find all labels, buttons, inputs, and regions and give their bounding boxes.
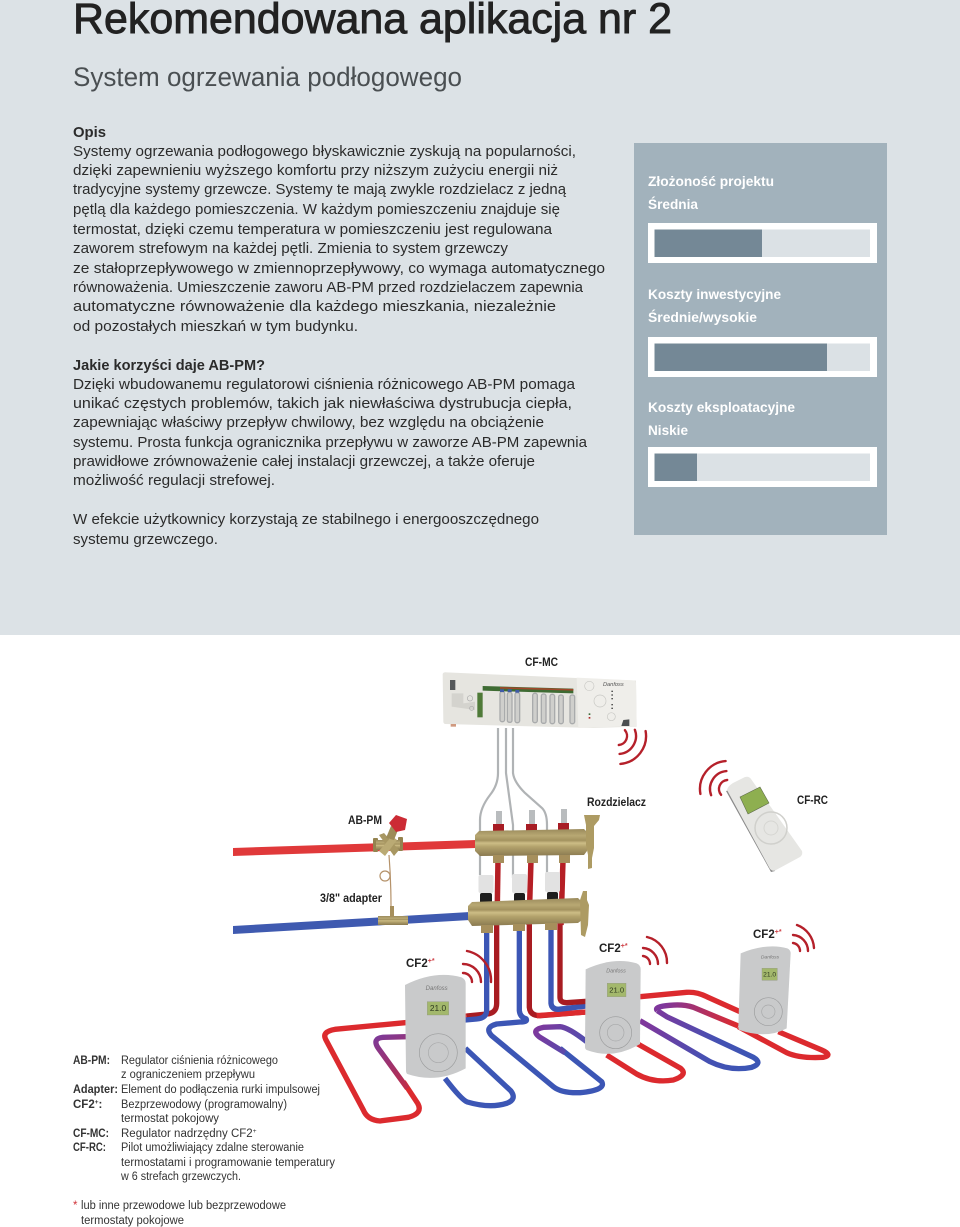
label: CF2 middle: +*	[621, 943, 628, 950]
return pipe	[233, 912, 470, 934]
text block: opis: termostat, dzięki czemu temperatura w pomieszczeniu jest regulowana	[73, 221, 553, 238]
legend: Bezprzewodowy (programowalny)	[121, 1099, 287, 1111]
text block: opis: Systemy ogrzewania podłogowego błyskawicznie zyskują na popularności,	[73, 143, 576, 160]
text block: korzyści: systemu. Prosta funkcja ogranicznika przepływu w zaworze AB-PM zapewnia	[73, 434, 588, 451]
rating: złożoność projektu	[648, 173, 877, 263]
icon: wireless signal CF2 left	[463, 951, 491, 982]
label: CF2 left: +*	[428, 958, 435, 965]
supply manifold	[475, 809, 600, 869]
air vent upper	[584, 815, 600, 869]
text block: opis: dzięki zapewnieniu wyższego komfortu przy niższym zużyciu energii niż	[73, 162, 558, 179]
rating: złożoność projektu: Złożoność projektu	[648, 173, 774, 189]
text block: efekt: systemu grzewczego.	[73, 531, 218, 548]
text block: korzyści: prawidłowe zrównoważenie całej instalacji grzewczej, a także oferuje	[73, 453, 535, 470]
footnote: lub inne przewodowe lub bezprzewodowe	[81, 1200, 286, 1212]
label: CF2 right: +*	[775, 929, 782, 936]
legend: z ograniczeniem przepływu	[121, 1069, 255, 1081]
legend: Adapter:	[73, 1084, 118, 1096]
text block: opis: równoważenia. Umieszczenie zaworu AB-PM przed rozdzielaczem zapewnia	[73, 279, 584, 296]
legend: termostat pokojowy	[121, 1113, 219, 1125]
icon: wireless signal CF-MC	[619, 730, 646, 764]
rating: koszty eksploatacyjne: Koszty eksploatacyjne	[648, 399, 795, 415]
rating: koszty eksploatacyjne	[648, 399, 877, 487]
footnote: *	[73, 1200, 78, 1212]
icon: wireless signal CF-RC	[700, 761, 727, 795]
label: CF-RC: CF-RC	[797, 795, 828, 807]
thermostat 1	[405, 975, 466, 1078]
thermostat 1: Danfoss	[426, 986, 448, 992]
CF-MC controller: Danfoss	[603, 682, 624, 688]
rating: koszty inwestycyjne: Koszty inwestycyjne	[648, 286, 781, 302]
footnote	[73, 1200, 286, 1227]
legend: AB-PM:	[73, 1055, 110, 1067]
text block: efekt: W efekcie użytkownicy korzystają ze stabilnego i energooszczędnego	[73, 511, 539, 528]
capillary wires	[480, 728, 547, 878]
actuators	[478, 872, 560, 904]
text block: korzyści: możliwość regulacji strefowej.	[73, 472, 275, 489]
AB-PM valve	[373, 815, 407, 907]
text block: opis: zaworem strefowym na każdej pętli. Zmienia to system grzewczy	[73, 240, 509, 257]
text block: opis: pętlą dla każdego pomieszczenia. W każdym pomieszczeniu znajduje się	[73, 201, 560, 218]
legend: Pilot umożliwiający zdalne sterowanie	[121, 1142, 304, 1154]
diagram: floor heating system	[233, 657, 828, 1121]
supply pipe	[233, 840, 476, 856]
rating: złożoność projektu: Średnia	[648, 195, 698, 212]
label: Rozdzielacz: Rozdzielacz	[587, 797, 646, 809]
subtitle: System ogrzewania podłogowego	[73, 62, 462, 92]
rating: koszty inwestycyjne	[648, 286, 877, 377]
text block: opis: tradycyjne systemy grzewcze. Systemy te mają zwykle rozdzielacz z jedną	[73, 181, 567, 198]
text block: opis: automatyczne równoważenie dla każdego mieszkania, niezależnie	[73, 298, 556, 315]
text block: korzyści: Dzięki wbudowanemu regulatorowi ciśnienia różnicowego AB-PM pomaga	[73, 376, 576, 393]
legend: termostatami i programowanie temperatury	[121, 1157, 335, 1169]
icon: wireless signal CF2 middle	[643, 937, 667, 964]
legend: w 6 strefach grzewczych.	[120, 1171, 241, 1183]
icon: wireless signal CF2 right	[793, 925, 814, 951]
text block: korzyści	[73, 357, 588, 489]
text block: efekt	[73, 511, 539, 548]
legend	[73, 1055, 335, 1183]
text block: opis: ze stałoprzepływowego w zmiennoprzepływowy, co wymaga automatycznego	[73, 260, 605, 277]
text block: korzyści: Jakie korzyści daje AB-PM?	[73, 357, 265, 374]
legend: +	[253, 1128, 257, 1135]
label: AB-PM: AB-PM	[348, 815, 382, 827]
floor heating pipes	[325, 922, 828, 1121]
text block: opis	[73, 124, 605, 335]
thermostat 2: Danfoss	[606, 969, 626, 975]
legend: CF-MC:	[73, 1128, 109, 1140]
rating: koszty eksploatacyjne: Niskie	[648, 422, 688, 438]
rating: koszty inwestycyjne: Średnie/wysokie	[648, 308, 757, 325]
CF-RC remote	[726, 777, 802, 872]
return manifold	[468, 891, 589, 937]
legend: Element do podłączenia rurki impulsowej	[121, 1084, 320, 1096]
legend: CF2	[73, 1099, 95, 1111]
thermostat 3: 21.0	[763, 972, 776, 979]
3/8 inch adapter	[378, 906, 408, 925]
panel: ratings	[634, 143, 887, 535]
text block: korzyści: unikać częstych problemów, takich jak niewłaściwa dystrubucja ciepła,	[73, 395, 572, 412]
footnote: termostaty pokojowe	[81, 1215, 184, 1227]
legend: Regulator nadrzędny CF2	[121, 1128, 253, 1140]
label: CF2 left: CF2	[406, 958, 428, 970]
CF-MC controller	[443, 672, 637, 728]
thermostat 3	[738, 946, 791, 1034]
thermostat 2: 21.0	[609, 986, 624, 995]
thermostat 3: Danfoss	[761, 954, 780, 960]
top background panel	[0, 0, 960, 635]
thermostat 1: 21.0	[430, 1003, 446, 1013]
legend: :	[99, 1099, 102, 1111]
label: CF2 right: CF2	[753, 929, 775, 941]
text block: opis: Opis	[73, 124, 106, 141]
text block: korzyści: zapewniając właściwy przepływ chwilowy, bez względu na obciążenie	[73, 414, 544, 431]
thermostat 2	[585, 961, 641, 1054]
manifold outlet pipes	[497, 860, 563, 925]
legend: CF-RC:	[73, 1142, 106, 1154]
legend: Regulator ciśnienia różnicowego	[121, 1055, 278, 1067]
legend: +	[95, 1099, 99, 1106]
label: CF-MC: CF-MC	[525, 657, 558, 669]
label: adapter: 3/8" adapter	[320, 893, 382, 905]
text block: opis: od pozostałych mieszkań w tym budynku.	[73, 318, 358, 335]
label: CF2 middle: CF2	[599, 943, 621, 955]
